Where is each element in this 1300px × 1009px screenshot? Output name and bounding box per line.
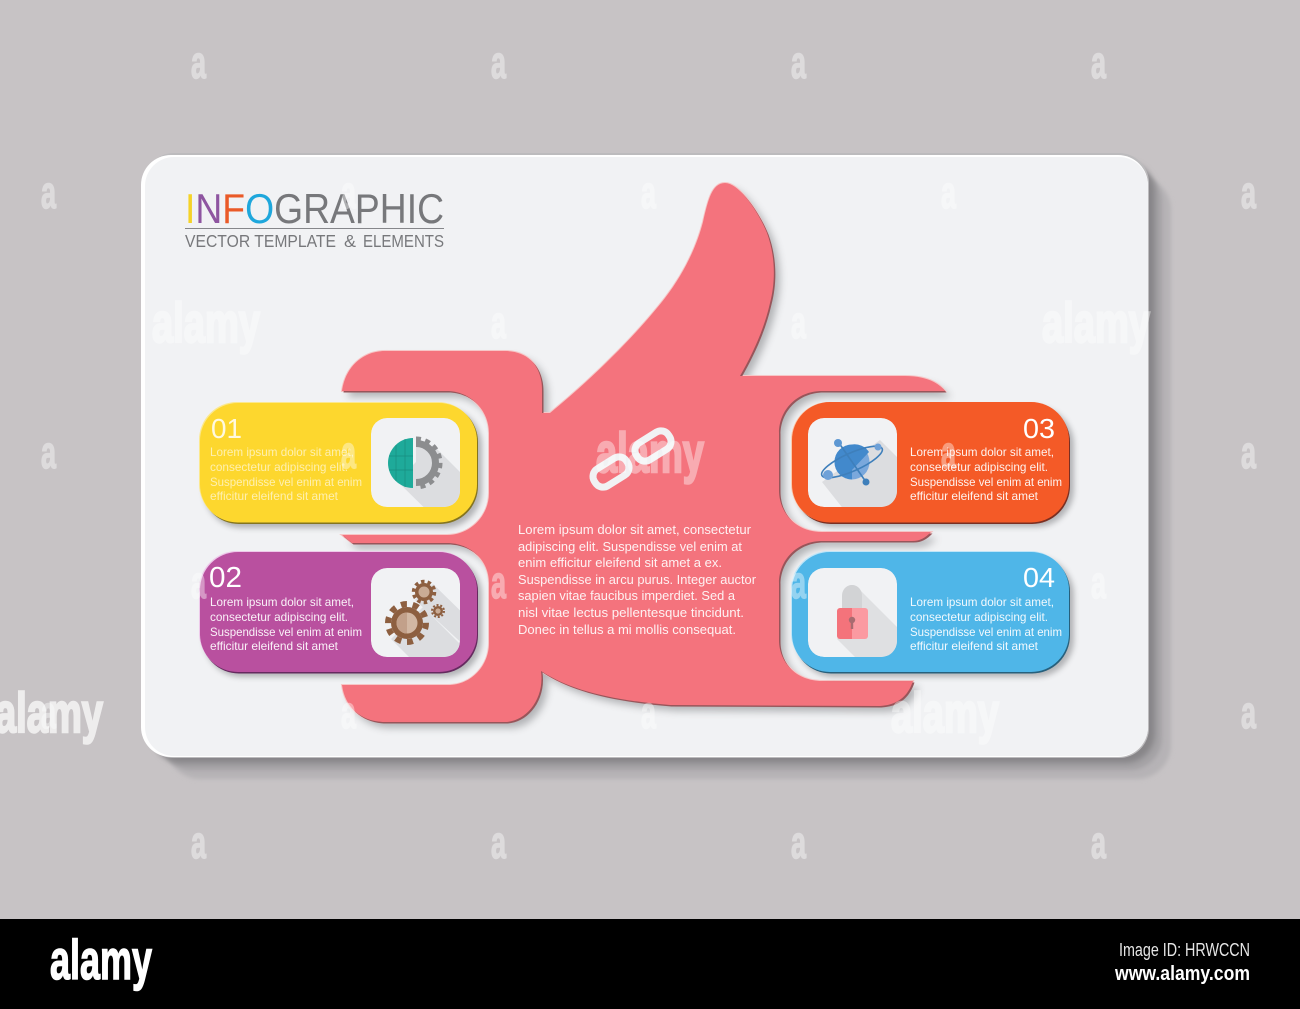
title: INFOGRAPHIC	[185, 185, 444, 232]
number 03: 03	[1023, 413, 1055, 444]
text 03: consectetur adipiscing elit.	[910, 460, 1048, 474]
website: www.alamy.com	[1114, 963, 1250, 985]
subtitle: &	[344, 231, 356, 251]
text 02: consectetur adipiscing elit.	[210, 610, 348, 624]
subtitle: ELEMENTS	[363, 231, 444, 251]
text 03: Lorem ipsum dolor sit amet,	[910, 445, 1054, 459]
text 03	[910, 445, 1062, 503]
text 01: Suspendisse vel enim at enim	[210, 475, 362, 489]
panel: step 04	[791, 551, 1074, 690]
watermarks: a	[641, 167, 657, 218]
text 02: Lorem ipsum dolor sit amet,	[210, 595, 354, 609]
subtitle: VECTOR TEMPLATE	[185, 231, 336, 251]
text 04: consectetur adipiscing elit.	[910, 610, 1048, 624]
watermarks: a	[341, 427, 357, 478]
text 03: efficitur eleifend sit amet	[910, 489, 1039, 503]
watermarks: a	[1241, 427, 1257, 478]
watermarks: a	[791, 297, 807, 348]
text 02: efficitur eleifend sit amet	[210, 639, 339, 653]
number 01: 01	[211, 413, 242, 444]
panel: step 01	[199, 402, 482, 530]
center text block: sapien vitae faucibus imperdiet. Sed a	[518, 589, 735, 603]
panel: step 03	[791, 402, 1074, 530]
text 02: Suspendisse vel enim at enim	[210, 625, 362, 639]
watermarks: a	[491, 817, 507, 868]
icon: chain link	[590, 427, 674, 491]
center text block: enim efficitur eleifend sit amet a ex.	[518, 556, 722, 570]
text 04: efficitur eleifend sit amet	[910, 639, 1039, 653]
watermarks: a	[941, 427, 957, 478]
text 04: Lorem ipsum dolor sit amet,	[910, 595, 1054, 609]
number 04: 04	[1023, 562, 1055, 593]
watermarks: a	[1241, 687, 1257, 738]
watermarks: a	[491, 557, 507, 608]
watermarks: alamy	[1042, 291, 1150, 354]
text 01: Lorem ipsum dolor sit amet,	[210, 445, 354, 459]
watermarks: a	[641, 687, 657, 738]
watermarks: alamy	[596, 421, 704, 484]
subtitle	[185, 231, 444, 251]
watermarks: a	[791, 37, 807, 88]
text 01	[210, 445, 362, 503]
watermarks: a	[491, 297, 507, 348]
watermarks: a	[191, 817, 207, 868]
icon: gears	[371, 568, 460, 657]
watermarks: a	[191, 37, 207, 88]
footer bar	[0, 919, 1300, 1009]
watermarks: a	[1091, 817, 1107, 868]
watermarks: a	[41, 167, 57, 218]
watermarks: a	[491, 37, 507, 88]
watermarks: a	[941, 167, 957, 218]
center text block: Lorem ipsum dolor sit amet, consectetur	[518, 523, 751, 537]
center text block: Suspendisse in arcu purus. Integer auctor	[518, 573, 756, 587]
heading: infographic title	[185, 185, 444, 251]
watermarks: a	[1091, 557, 1107, 608]
watermarks	[41, 37, 1257, 868]
text 01: consectetur adipiscing elit.	[210, 460, 348, 474]
watermarks: a	[341, 687, 357, 738]
watermarks: a	[1241, 167, 1257, 218]
center text block	[518, 523, 756, 637]
icon: padlock	[808, 568, 897, 657]
text 01: efficitur eleifend sit amet	[210, 489, 339, 503]
watermarks: a	[341, 167, 357, 218]
number 02: 02	[209, 562, 242, 594]
watermarks: a	[791, 557, 807, 608]
icon: globe and gear	[371, 418, 460, 507]
watermarks: a	[791, 817, 807, 868]
watermarks: alamy	[891, 681, 999, 744]
watermarks: alamy	[152, 291, 260, 354]
text 04: Suspendisse vel enim at enim	[910, 625, 1062, 639]
text 03: Suspendisse vel enim at enim	[910, 475, 1062, 489]
footer logo: alamy	[50, 928, 152, 991]
thumbs-up hand shape	[342, 183, 951, 728]
image id: Image ID: HRWCCN	[1119, 940, 1250, 960]
watermarks: a	[1091, 37, 1107, 88]
icon: planet	[808, 418, 897, 507]
panel: step 02	[199, 551, 482, 690]
watermarks: a	[41, 687, 57, 738]
text 04	[910, 595, 1062, 653]
center text block: adipiscing elit. Suspendisse vel enim at	[518, 540, 743, 554]
watermarks: a	[191, 557, 207, 608]
center text block: Donec in tellus a mi mollis consequat.	[518, 623, 736, 637]
panel: white card with long shadow	[141, 153, 1171, 779]
text 02	[210, 595, 362, 653]
watermarks: a	[41, 427, 57, 478]
center text block: nisl vitae lectus pellentesque tincidunt.	[518, 606, 744, 620]
